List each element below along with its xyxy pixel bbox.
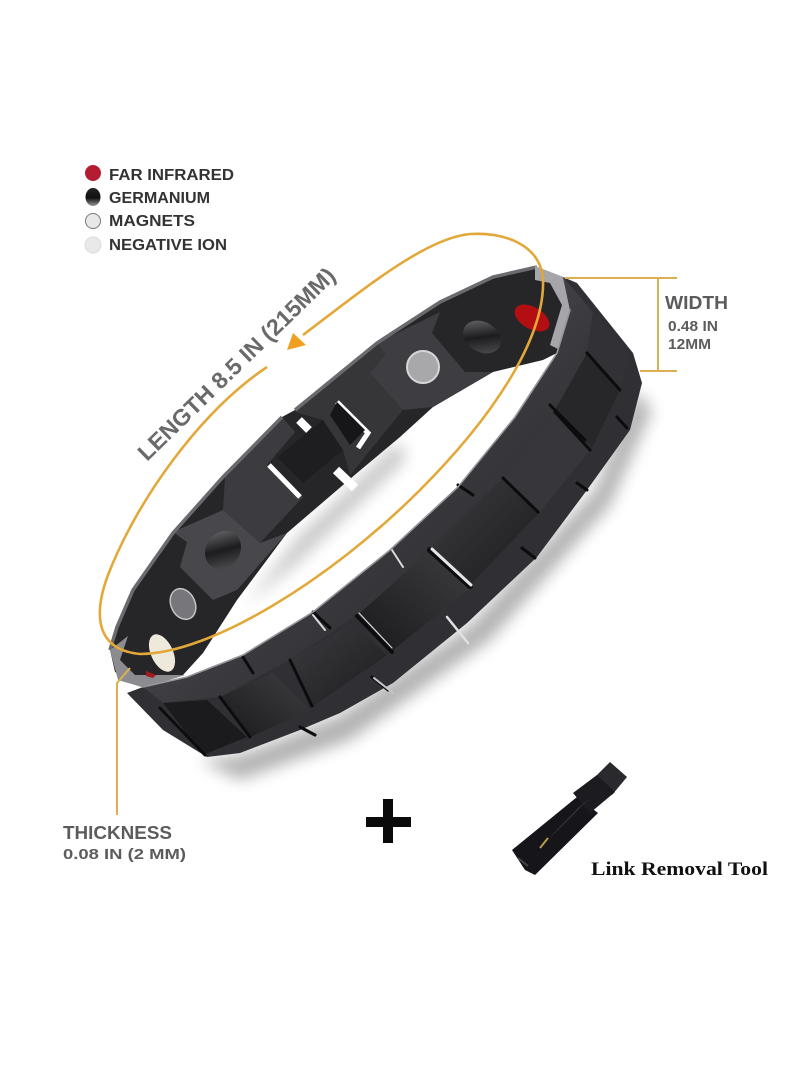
thickness label: 0.08 IN (2 MM): [63, 847, 186, 863]
inner link left of clasp: [223, 417, 303, 543]
end piece bottom: [110, 636, 185, 688]
front band silhouette: [127, 277, 642, 757]
magnet: silver top: [407, 351, 439, 383]
legend item: negative ion: NEGATIVE ION: [109, 237, 227, 254]
width label: [665, 292, 728, 353]
center plate D: [360, 548, 472, 650]
clasp white gaps: [269, 402, 368, 497]
width label: 0.48 IN: [668, 319, 718, 335]
arrow head: [287, 333, 306, 350]
plus sign: [366, 799, 411, 843]
thickness dimension line: [117, 668, 130, 815]
clasp: [277, 420, 343, 483]
band top edge highlight: [110, 267, 537, 650]
magnet: negative ion white: [144, 630, 180, 676]
magnet: germanium top: [457, 314, 507, 360]
link removal tool label: Link Removal Tool: [591, 859, 768, 880]
width label: 12MM: [668, 337, 711, 353]
legend: [85, 165, 234, 254]
width label: WIDTH: [665, 292, 728, 313]
center plate F: [503, 412, 590, 512]
bracelet shadows: [200, 390, 652, 780]
length label: LENGTH 8.5 IN (215MM): [132, 262, 340, 466]
center plate C: [290, 623, 387, 708]
width dimension lines: [565, 278, 677, 371]
magnet: silver bottom: [165, 584, 201, 624]
end piece top: [535, 266, 575, 350]
clasp link: [295, 343, 403, 475]
center plate E: [433, 478, 538, 583]
bracelet front band: [127, 277, 642, 757]
center plate H: [587, 312, 630, 390]
length ellipse line: [100, 234, 543, 654]
legend item: far infrared: FAR INFRARED: [109, 167, 234, 184]
thickness label: THICKNESS: [63, 823, 172, 843]
upper side links: [143, 277, 593, 703]
icon: link removal tool: [512, 762, 627, 875]
center plate A: [163, 700, 247, 755]
thickness label: [63, 823, 186, 863]
bracelet back band (inner face): [110, 266, 575, 688]
magnet: far infrared red: [510, 299, 554, 337]
center plate B: [220, 673, 310, 737]
length arc with arrow: [100, 234, 543, 654]
magnet: germanium bottom: [198, 524, 248, 576]
small red magnet edge: [146, 671, 156, 678]
legend item: germanium: GERMANIUM: [109, 190, 210, 207]
plate dividers: [143, 310, 627, 755]
clasp bar: [330, 402, 365, 445]
inner link with silver magnet: [370, 312, 493, 410]
legend item: magnets: MAGNETS: [109, 213, 195, 230]
inner link with germanium: [173, 510, 287, 600]
center plate G: [555, 353, 620, 448]
